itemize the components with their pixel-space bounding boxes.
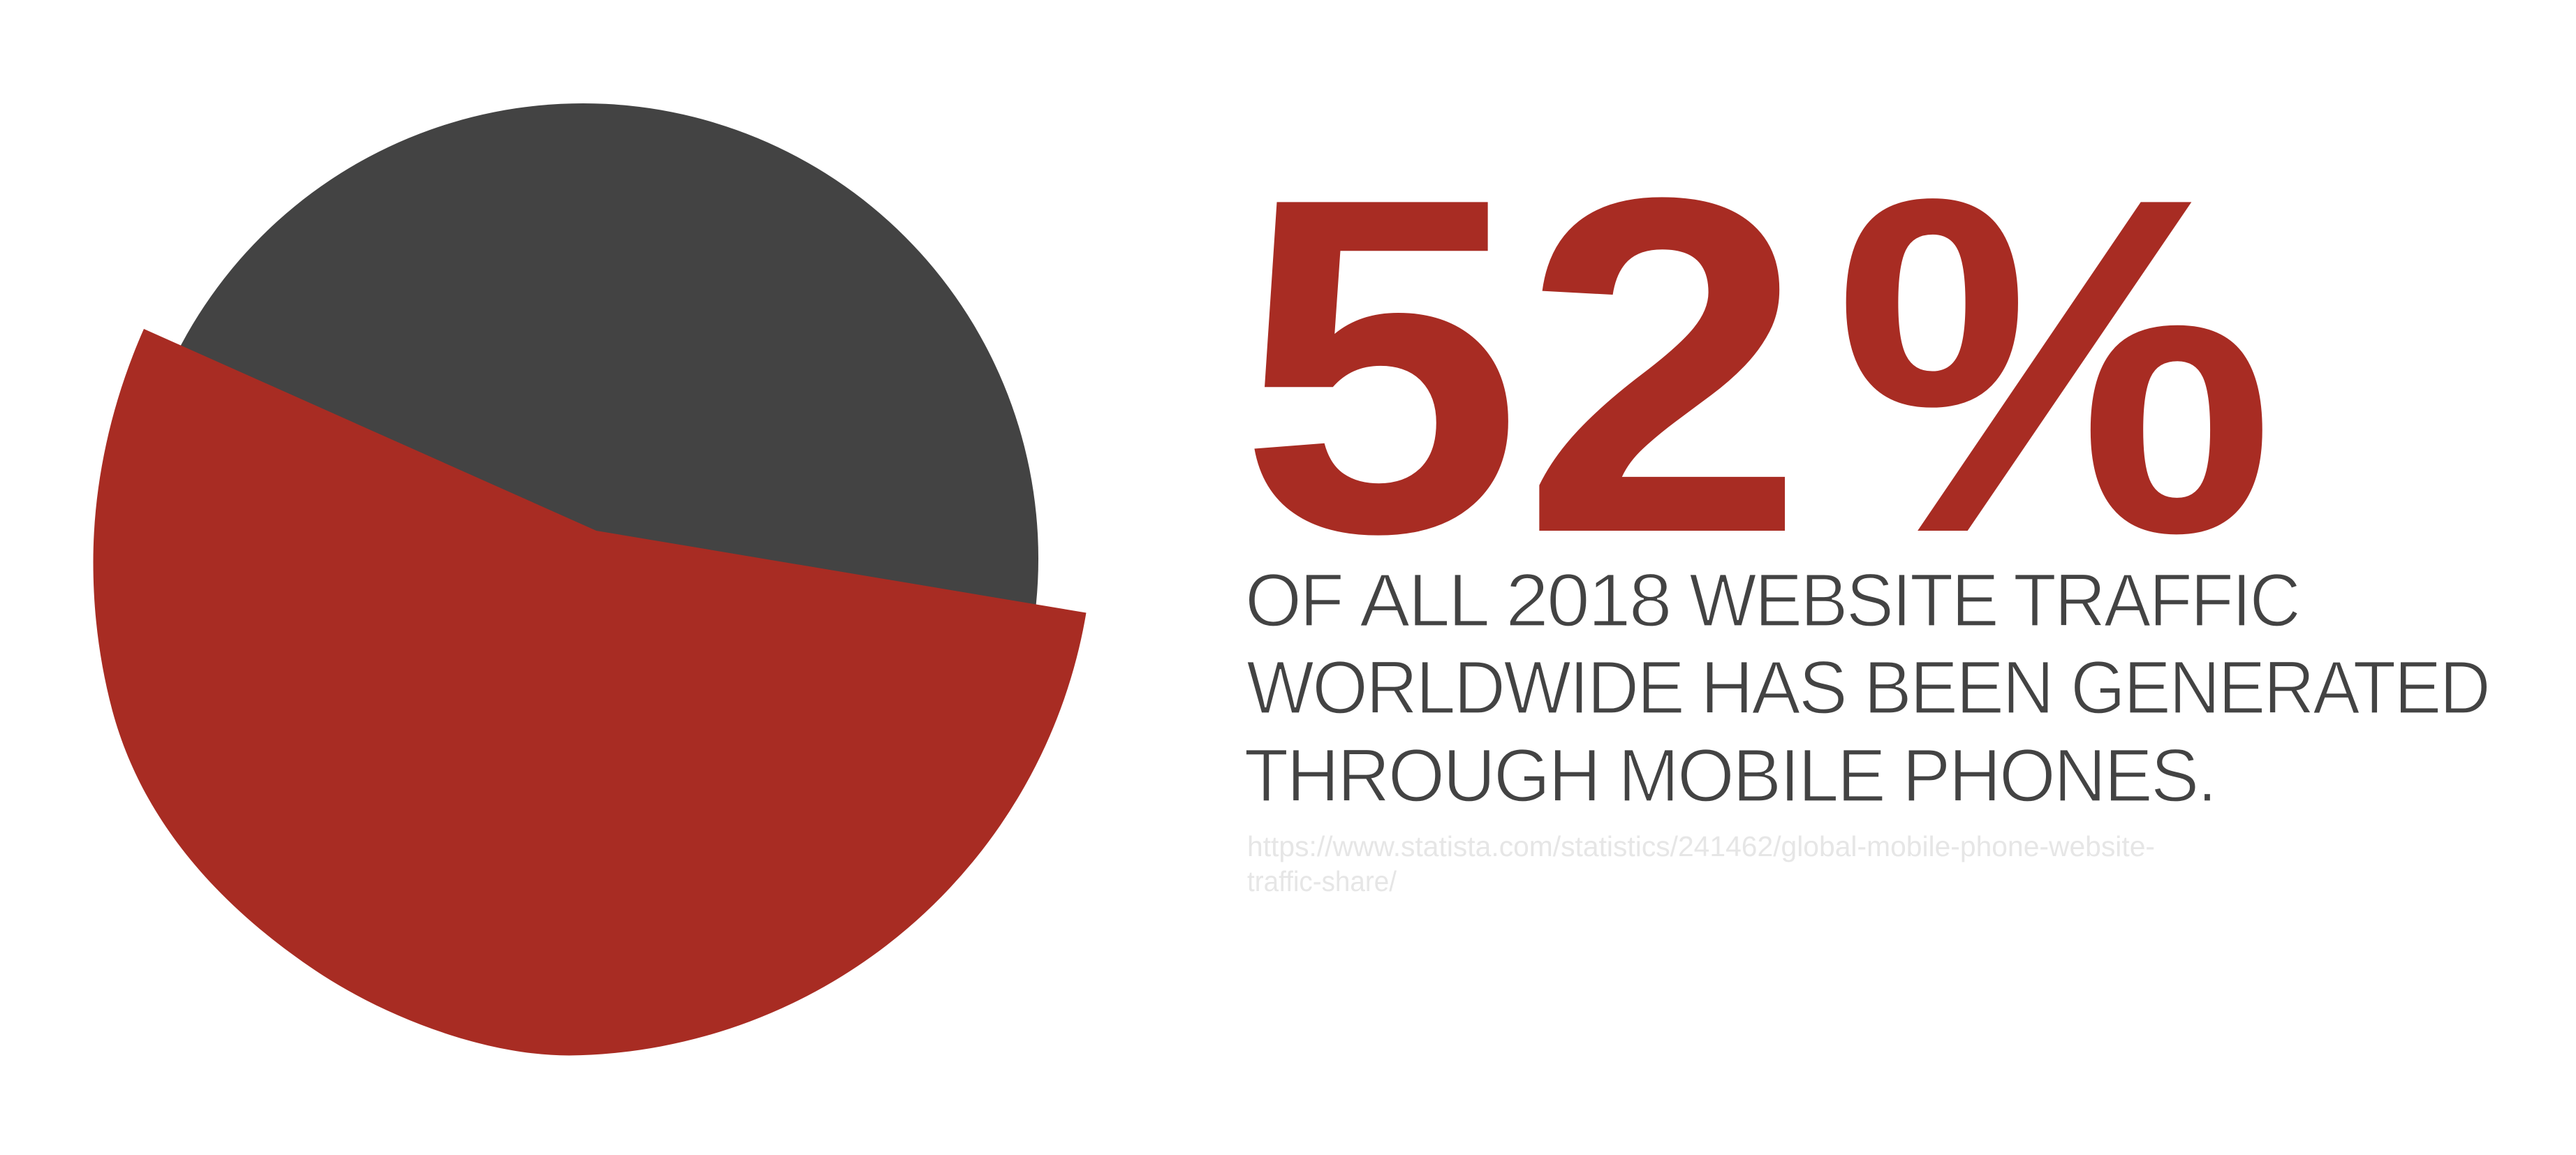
digits 52: 52 bbox=[1239, 98, 1805, 632]
description line 1 bbox=[1245, 557, 2299, 642]
source line 2: traffic-share/ bbox=[1247, 865, 1397, 897]
description line 2: GENERATED bbox=[2070, 645, 2489, 729]
description line 3 bbox=[1244, 733, 2215, 817]
percent sign: % bbox=[1834, 98, 2276, 632]
description line 3: THROUGH bbox=[1244, 733, 1599, 817]
description line 1: 2018 bbox=[1506, 557, 1670, 642]
description line 1: OF bbox=[1245, 557, 1342, 642]
pie chart bbox=[94, 103, 1087, 1056]
description line 2: BEEN bbox=[1864, 645, 2052, 729]
description line 1: WEBSITE bbox=[1689, 557, 1997, 642]
source link bbox=[1247, 830, 2155, 897]
description line 3: MOBILE bbox=[1618, 733, 1884, 817]
description line 2: WORLDWIDE bbox=[1246, 645, 1683, 729]
description line 3: PHONES. bbox=[1902, 733, 2215, 817]
description line 1: ALL bbox=[1360, 557, 1488, 642]
pie slice: mobile traffic 52% (red) bbox=[94, 329, 1087, 1056]
description line 2 bbox=[1246, 645, 2489, 729]
pie slice: other traffic (gray) bbox=[128, 103, 1038, 1014]
headline figure 52% bbox=[1239, 98, 2276, 632]
description text bbox=[1244, 557, 2489, 817]
description line 2: HAS bbox=[1700, 645, 1846, 729]
description line 1: TRAFFIC bbox=[2013, 557, 2299, 642]
source line 1: https://www.statista.com/statistics/241462/global-mobile-phone-website- bbox=[1247, 830, 2155, 862]
